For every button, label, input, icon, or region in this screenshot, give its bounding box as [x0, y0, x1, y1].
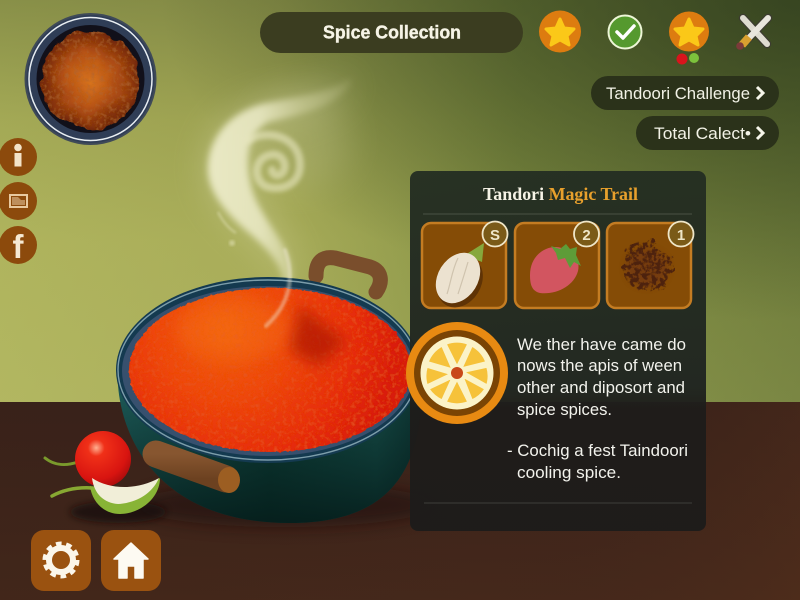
tomato and lime garnish: [45, 431, 166, 523]
panel: Tandori Magic Trail: [406, 171, 706, 531]
panel description: cooling spice.: [517, 464, 621, 482]
icon: info: [0, 138, 37, 176]
red spice powder mound: [129, 288, 411, 452]
icon: crossed tools: [736, 18, 768, 50]
panel heading: Tandori Magic Trail: [483, 184, 638, 204]
chili stem: [45, 458, 78, 465]
background: wooden table: [0, 402, 800, 600]
step badge 3: S: [490, 227, 500, 244]
pot back handle: [316, 258, 380, 292]
second stem: [52, 488, 93, 496]
panel description: We ther have came do: [517, 336, 686, 354]
button: home: [101, 530, 161, 591]
panel description: other and diposort and: [517, 379, 685, 397]
step badge 2: [574, 222, 599, 246]
step badge 2: 2: [582, 227, 591, 244]
icon: citrus slice medallion: [406, 322, 508, 424]
lime wedge: [90, 478, 160, 514]
ingredient slot: ground spice: [607, 223, 691, 308]
background: kitchen wall: [0, 0, 800, 402]
pot rim: [116, 277, 420, 463]
panel description: - Cochig a fest Taindoori: [507, 442, 688, 460]
steam swirl: [208, 78, 352, 290]
button: Total Calect: [636, 116, 779, 150]
icon: star badge with status dots: [669, 12, 709, 64]
icon: check badge: [608, 16, 642, 48]
red tomato: [75, 431, 131, 487]
panel description: [507, 336, 688, 482]
spice bowl thumbnail: [24, 13, 156, 145]
rising steam over powder: [266, 250, 290, 326]
left side icon buttons: [0, 138, 37, 265]
icon: card: [0, 182, 37, 220]
pot front handle: [156, 454, 240, 493]
button: Total Calect: Total Calect•: [654, 125, 751, 143]
pot body: [118, 385, 422, 523]
button: Tandoori Challenge: [591, 76, 779, 110]
button: settings: [31, 530, 91, 591]
ingredient slot: strawberry: [515, 223, 599, 308]
top title pill: Spice Collection: [323, 22, 461, 42]
icon: facebook: f: [12, 228, 24, 265]
panel description: spice spices.: [517, 401, 612, 419]
panel description: nows the apis of ween: [517, 357, 682, 375]
step badge 1: 1: [677, 227, 685, 244]
top title pill: [260, 12, 523, 53]
button: Tandoori Challenge: Tandoori Challenge: [606, 85, 750, 103]
icon: star badge: [539, 10, 581, 52]
ingredient slot: garlic: [422, 223, 506, 316]
step badge 1: [668, 222, 694, 246]
cooking pot with red spice powder: [116, 250, 435, 527]
step badge 3: [482, 222, 508, 246]
